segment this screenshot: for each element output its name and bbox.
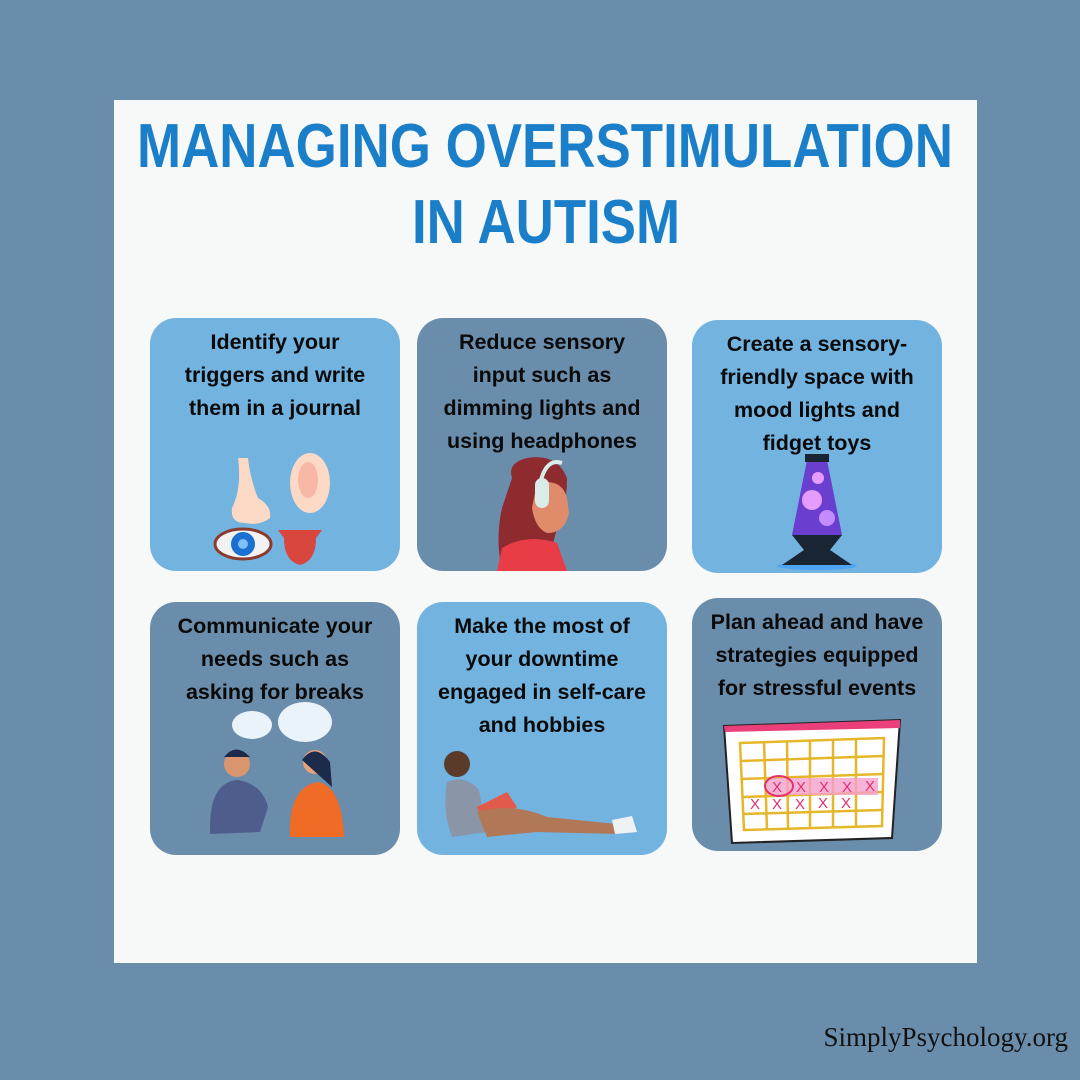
card: reduce sensory input: input such as [473, 363, 611, 387]
icon: calendar: X [842, 779, 852, 796]
card: downtime: Make the most of [454, 614, 630, 638]
icon: senses [214, 453, 330, 565]
icon: calendar: X [865, 778, 875, 795]
card: plan ahead: strategies equipped [715, 643, 919, 667]
card: downtime: and hobbies [479, 713, 605, 737]
card: plan ahead: for stressful events [718, 676, 916, 700]
card: sensory friendly space [692, 320, 942, 573]
icon: calendar: X [796, 779, 806, 796]
icon: calendar: X [750, 796, 760, 813]
card: reduce sensory input: Reduce sensory [459, 330, 625, 354]
icon: girl with headphones [497, 457, 569, 571]
icon: lava lamp [777, 454, 857, 570]
icon: calendar: X [841, 795, 851, 812]
footer: source: SimplyPsychology.org [823, 1022, 1068, 1052]
card: plan ahead: Plan ahead and have [711, 610, 923, 634]
title: IN AUTISM [412, 188, 680, 257]
card: identify triggers: them in a journal [189, 396, 361, 420]
icon: calendar: X [819, 779, 829, 796]
card: sensory friendly space: Create a sensory- [727, 332, 907, 356]
card: downtime: engaged in self-care [438, 680, 646, 704]
card: communicate needs: Communicate your [178, 614, 372, 638]
card: identify triggers: triggers and write [185, 363, 365, 387]
title [137, 112, 953, 257]
card: communicate needs [150, 602, 400, 855]
card: reduce sensory input: dimming lights and [443, 396, 641, 420]
title: MANAGING OVERSTIMULATION [137, 112, 953, 181]
card: reduce sensory input [417, 318, 667, 571]
white panel [114, 100, 977, 963]
card: identify triggers [150, 318, 400, 571]
card: communicate needs: asking for breaks [186, 680, 364, 704]
card: sensory friendly space: mood lights and [734, 398, 900, 422]
card: communicate needs: needs such as [201, 647, 349, 671]
icon: calendar: X [772, 796, 782, 813]
icon: calendar: X [818, 795, 828, 812]
icon: calendar: X [772, 779, 782, 796]
icon: calendar: X [795, 796, 805, 813]
card: sensory friendly space: fidget toys [763, 431, 871, 455]
card: identify triggers: Identify your [210, 330, 340, 354]
card: plan ahead [692, 598, 942, 851]
card: reduce sensory input: using headphones [447, 429, 637, 453]
card: sensory friendly space: friendly space with [720, 365, 914, 389]
icon: man reading [444, 751, 637, 837]
icon: calendar [722, 719, 902, 844]
card: downtime: your downtime [466, 647, 618, 671]
icon: two people talking [210, 702, 344, 837]
card: downtime [417, 602, 667, 855]
